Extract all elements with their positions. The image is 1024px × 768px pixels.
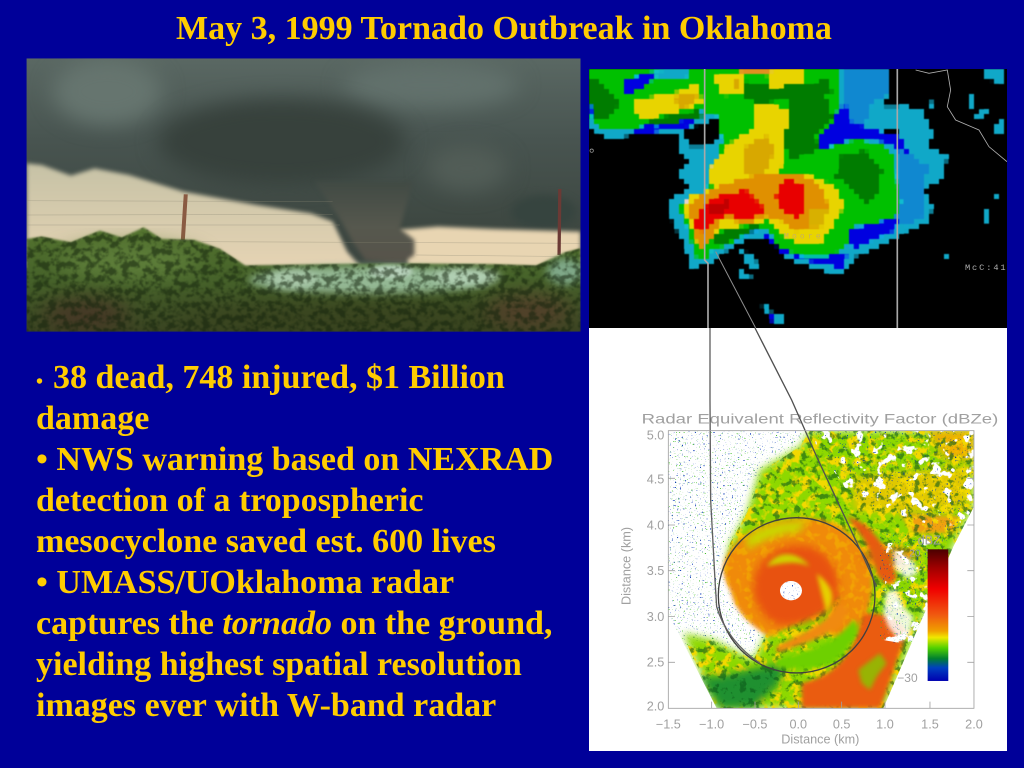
- bullet 2: • NWS warning based on NEXRAD: [36, 441, 553, 478]
- photo: tornado over vegetation: [27, 58, 583, 333]
- x axis labels: [656, 717, 983, 731]
- W-band reflectivity scan: [668, 431, 974, 708]
- bullet 1: •: [36, 371, 43, 393]
- bullet 2: mesocyclone saved est. 600 lives: [36, 523, 496, 560]
- y axis labels: 3.5: [647, 564, 664, 578]
- bullet 3: captures the tornado on the ground,: [36, 605, 552, 642]
- y axis labels: 3.0: [647, 610, 664, 624]
- x axis labels: −1.5: [656, 717, 681, 731]
- color scale: dBZ: [918, 533, 941, 547]
- y axis labels: 5.0: [647, 429, 664, 443]
- county and state lines: [590, 69, 1007, 328]
- reflectivity plot panel: [589, 328, 1007, 751]
- x axis title: Distance (km): [781, 732, 859, 746]
- county and state lines: Moore: [784, 232, 821, 241]
- plot title: Radar Equivalent Reflectivity Factor (dBZe): [642, 410, 998, 426]
- color scale: [897, 533, 948, 685]
- bullet 2: detection of a tropospheric: [36, 482, 423, 519]
- y axis title: Distance (km): [620, 527, 634, 605]
- x axis labels: 1.0: [876, 717, 894, 731]
- color scale: −30: [897, 671, 918, 685]
- title: May 3, 1999 Tornado Outbreak in Oklahoma: [176, 10, 832, 47]
- bullet 3: [36, 564, 552, 724]
- bullet 1: [36, 359, 505, 437]
- y axis labels: [647, 429, 664, 714]
- county and state lines: McC:41: [965, 263, 1006, 273]
- radar echoes: [589, 69, 1007, 328]
- vortex eye: [780, 581, 802, 600]
- bullet 2: [36, 441, 553, 560]
- bullet 3: • UMASS/UOklahoma radar: [36, 564, 454, 601]
- bullet 3: yielding highest spatial resolution: [36, 646, 522, 683]
- circle and track lines: [710, 328, 877, 673]
- vortex swirl: [723, 518, 872, 640]
- x axis labels: 2.0: [965, 717, 983, 731]
- y axis labels: 2.5: [647, 656, 664, 670]
- x axis labels: −0.5: [742, 717, 767, 731]
- axes: [668, 431, 974, 708]
- bullet 1: 38 dead, 748 injured, $1 Billion: [53, 359, 505, 396]
- green and yellow field: [683, 431, 974, 708]
- bullet list: [36, 359, 553, 724]
- color scale: 20: [909, 549, 921, 560]
- x axis labels: 0.0: [790, 717, 807, 731]
- white return gaps: [807, 431, 974, 533]
- radar reflectivity map: [589, 69, 1007, 328]
- y axis labels: 2.0: [647, 700, 664, 714]
- y axis labels: 4.5: [647, 472, 664, 486]
- x axis labels: 0.5: [833, 717, 850, 731]
- bullet 3: images ever with W-band radar: [36, 687, 496, 724]
- bullet 1: damage: [36, 400, 149, 437]
- x axis labels: 1.5: [921, 717, 939, 731]
- x axis labels: −1.0: [699, 717, 724, 731]
- y axis labels: 4.0: [647, 518, 664, 532]
